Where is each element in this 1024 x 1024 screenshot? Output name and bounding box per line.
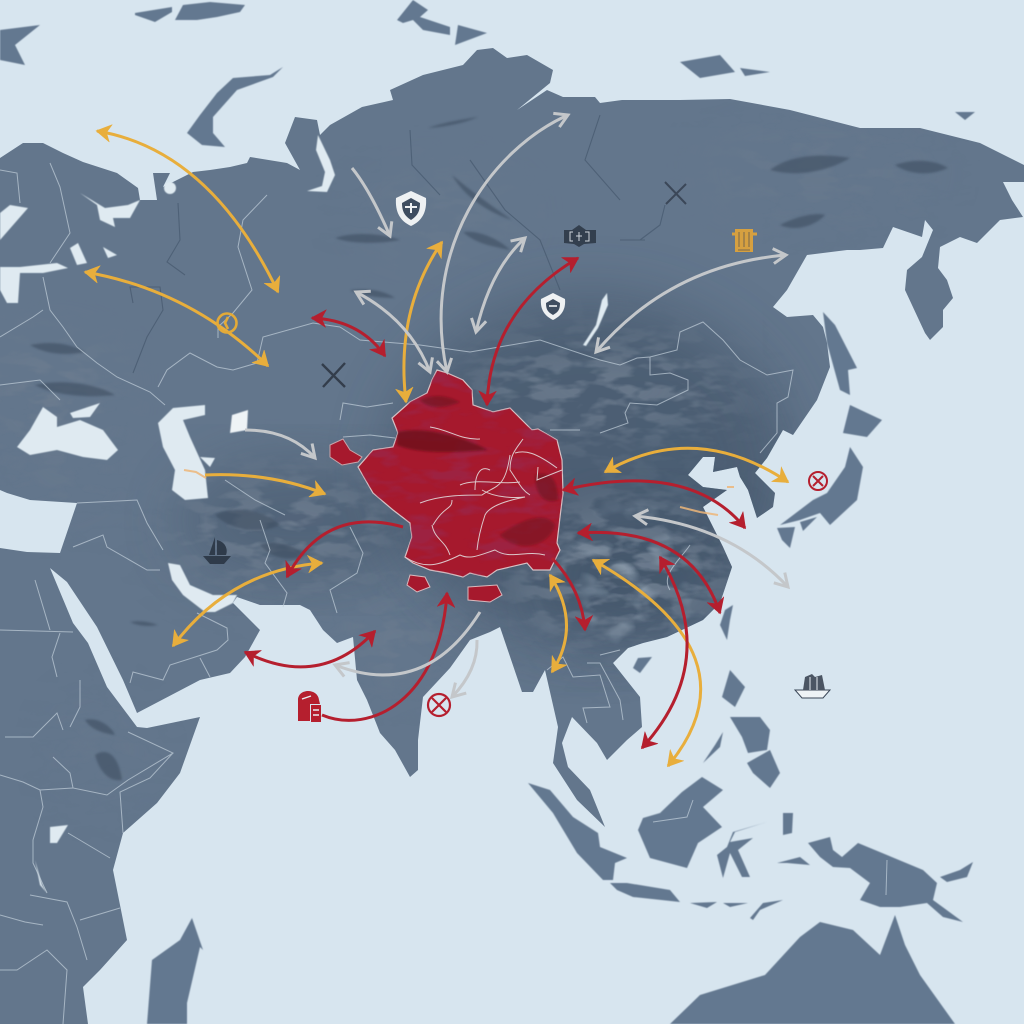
red arrows: [245, 258, 745, 748]
Hainan: [633, 657, 652, 673]
Middle East borders: [77, 500, 163, 550]
small red territories: [330, 439, 362, 465]
Persian Gulf: [168, 563, 237, 612]
icon: cross central: [322, 363, 345, 387]
small orange markers: [184, 470, 734, 515]
yellow arrows: [85, 131, 788, 766]
Java and Lesser Sunda: [610, 883, 680, 902]
Sulawesi: [717, 822, 767, 878]
European borders: [0, 170, 20, 203]
Borneo: [638, 777, 723, 868]
Taiwan: [720, 605, 733, 640]
highlighted red region: [330, 365, 570, 602]
subdivision lines: [405, 427, 562, 565]
borders and rivers: [0, 163, 887, 1024]
icon: cross north-east: [665, 182, 686, 204]
Sakhalin: [823, 312, 857, 395]
icon: dark banner: [564, 225, 596, 247]
Sumatra: [528, 783, 627, 880]
icon: ship east: [795, 674, 830, 698]
mountain shading: [30, 117, 948, 780]
Lake Baikal: [583, 293, 608, 346]
icon: yellow ring: [218, 314, 236, 332]
icon: gold gate: [732, 229, 757, 252]
icon: large shield: [396, 191, 426, 226]
Gulf of Ob: [307, 135, 335, 192]
Russia, Mongolia and China borders: [600, 322, 793, 453]
icon: small shield: [541, 293, 565, 320]
Kazakhstan border: [158, 323, 340, 387]
inland seas and lakes: [0, 135, 608, 893]
Novaya Zemlya: [187, 67, 283, 147]
Japan: [843, 405, 882, 437]
icon: red crossed circle India: [428, 694, 450, 716]
African borders: [0, 630, 73, 632]
icon: red crossed circle Japan: [809, 472, 827, 490]
icon: ship west: [203, 537, 231, 564]
icon: red mailbox: [298, 691, 321, 722]
Philippines: [722, 670, 745, 707]
Southeast Asian borders: [547, 657, 610, 723]
Australia: [670, 915, 955, 1024]
dark rivers: [130, 115, 665, 373]
grey arrows: [245, 115, 788, 697]
New Guinea: [808, 837, 963, 922]
Madagascar: [147, 918, 203, 1024]
